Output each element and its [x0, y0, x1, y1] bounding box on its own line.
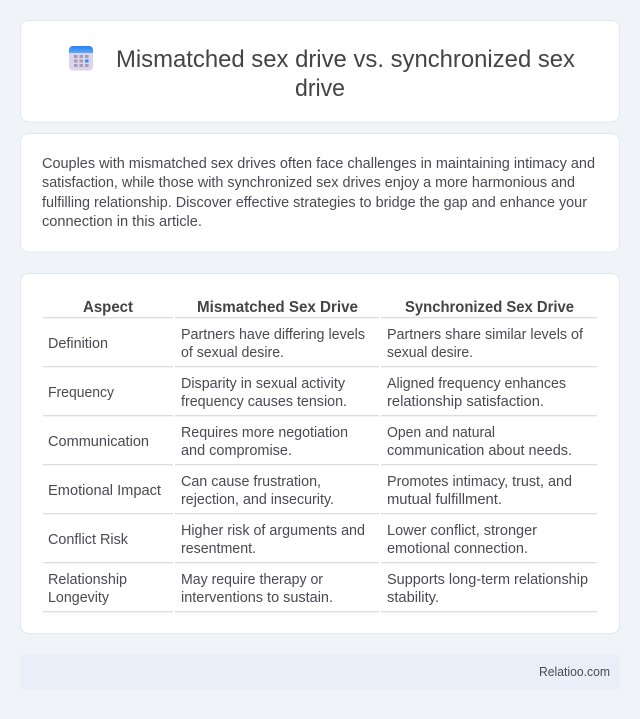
table row: communication: Communication — [48, 434, 149, 450]
table row: communication: and compromise. — [181, 443, 292, 459]
footer bar — [20, 655, 620, 689]
table row: communication: communication about needs. — [387, 443, 572, 459]
table row: conflict risk: emotional connection. — [387, 541, 528, 557]
table header row: Mismatched Sex Drive — [197, 299, 358, 316]
text block: intro paragraph: fulfilling relationship. Discover effective strategies to bridge the gap and enhance your — [42, 195, 587, 211]
table row: emotional impact: Promotes intimacy, trust, and — [387, 474, 572, 490]
table header row: Aspect — [83, 299, 134, 316]
table row: relationship longevity: interventions to sustain. — [181, 590, 333, 606]
table row: definition: Definition — [48, 336, 108, 352]
table row: emotional impact: Emotional Impact — [48, 483, 161, 499]
table row: definition — [43, 327, 597, 367]
title: drive — [295, 75, 345, 102]
table row: conflict risk: Higher risk of arguments and — [181, 523, 365, 539]
panel: introduction — [20, 134, 620, 252]
table row: relationship longevity: Longevity — [48, 590, 110, 606]
text block: intro paragraph: satisfaction, while those with synchronized sex drives enjoy a more harmonious and — [42, 175, 575, 191]
table header row — [43, 299, 597, 318]
title: Mismatched sex drive vs. synchronized sex — [116, 46, 575, 73]
table row: relationship longevity: Relationship — [48, 572, 127, 588]
table row: relationship longevity — [43, 572, 597, 612]
table row: frequency — [43, 376, 597, 416]
table row: communication: Requires more negotiation — [181, 425, 348, 441]
table row: conflict risk: resentment. — [181, 541, 256, 557]
table row: conflict risk: Conflict Risk — [48, 532, 129, 548]
table row: emotional impact: rejection, and insecurity. — [181, 492, 334, 508]
text block: intro paragraph — [42, 156, 595, 230]
table row: definition: Partners have differing levels — [181, 327, 365, 343]
table row: emotional impact — [43, 474, 597, 514]
table row: frequency: Aligned frequency enhances — [387, 376, 566, 392]
table row: communication — [43, 425, 597, 465]
panel: comparison table — [20, 274, 620, 634]
table row: frequency: frequency causes tension. — [181, 394, 347, 410]
table row: emotional impact: mutual fulfillment. — [387, 492, 502, 508]
table row: communication: Open and natural — [387, 425, 495, 441]
table row: relationship longevity: Supports long-term relationship — [387, 572, 588, 588]
footer bar: Relatioo.com — [539, 664, 610, 679]
text block: intro paragraph: connection in this article. — [42, 214, 202, 230]
table row: frequency: relationship satisfaction. — [387, 394, 544, 410]
table row: definition: of sexual desire. — [181, 345, 284, 361]
table row: emotional impact: Can cause frustration, — [181, 474, 321, 490]
table row: conflict risk: Lower conflict, stronger — [387, 523, 537, 539]
table header row: Synchronized Sex Drive — [405, 299, 574, 316]
panel: title header — [20, 20, 620, 122]
table row: conflict risk — [43, 523, 597, 563]
table row: frequency: Disparity in sexual activity — [181, 376, 346, 392]
text block: intro paragraph: Couples with mismatched sex drives often face challenges in maintaining intimacy and — [42, 156, 595, 172]
table row: relationship longevity: May require therapy or — [181, 572, 323, 588]
table row: frequency: Frequency — [48, 385, 115, 401]
table row: definition: Partners share similar levels of — [387, 327, 584, 343]
title — [116, 46, 575, 102]
icon: calendar — [69, 46, 93, 70]
table row: relationship longevity: stability. — [387, 590, 439, 606]
table row: definition: sexual desire. — [387, 345, 473, 361]
